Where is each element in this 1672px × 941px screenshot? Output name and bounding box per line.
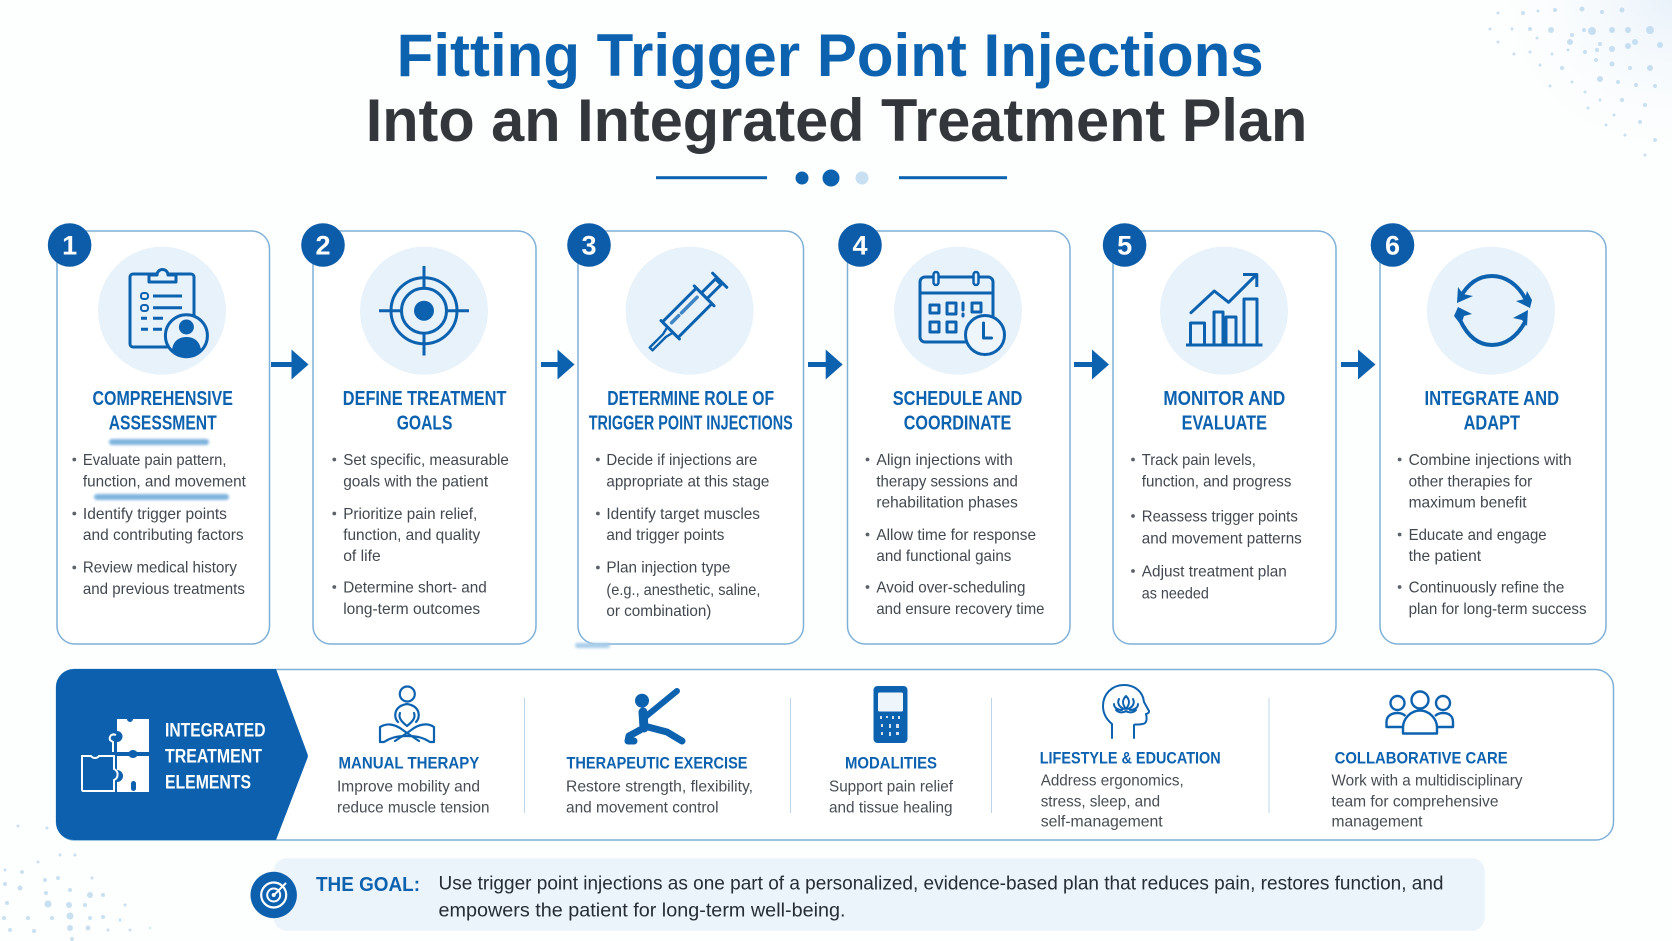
step title: EVALUATE — [1182, 412, 1267, 434]
step title: DETERMINE ROLE OF — [607, 388, 774, 410]
panel: step 2 define treatment goals — [301, 223, 536, 644]
element: therapeutic exercise: and movement control — [566, 799, 718, 816]
step bullets: Adjust treatment plan — [1142, 564, 1287, 581]
step title: INTEGRATE AND — [1424, 388, 1559, 410]
step title: GOALS — [397, 412, 452, 434]
element: therapeutic exercise: THERAPEUTIC EXERCISE — [566, 754, 748, 773]
step number 2 — [301, 223, 345, 267]
step bullets: and contributing factors — [83, 527, 244, 544]
step title: SCHEDULE AND — [893, 388, 1022, 410]
step title: ASSESSMENT — [109, 412, 217, 434]
icon: meditating person — [380, 686, 434, 742]
step title: ADAPT — [1464, 412, 1520, 434]
arrow 2 to 3 — [541, 350, 574, 380]
step title: COMPREHENSIVE — [92, 388, 233, 410]
step bullets: the patient — [1409, 548, 1482, 565]
element: therapeutic exercise: Restore strength, flexibility, — [566, 779, 753, 796]
element: therapeutic exercise — [566, 691, 753, 816]
step title: DEFINE TREATMENT — [343, 388, 506, 410]
icon: head with lotus — [1103, 685, 1149, 738]
step bullets — [72, 452, 246, 598]
step number 3: 3 — [581, 230, 597, 260]
step bullets: Continuously refine the — [1409, 580, 1564, 597]
step number 6: 6 — [1385, 230, 1400, 260]
step bullets: Set specific, measurable — [343, 452, 509, 469]
step number 1 — [48, 223, 91, 267]
element: modalities — [829, 686, 954, 816]
element: collaborative care: COLLABORATIVE CARE — [1335, 748, 1508, 767]
step bullets: and ensure recovery time — [876, 601, 1044, 618]
step bullets: and previous treatments — [83, 581, 245, 598]
step bullets: maximum benefit — [1409, 495, 1527, 512]
step bullets: Educate and engage — [1409, 527, 1547, 544]
step bullets — [1131, 452, 1302, 602]
step title — [893, 388, 1022, 434]
panel: step 6 integrate and adapt — [1371, 223, 1606, 644]
step bullets — [1398, 452, 1587, 618]
step bullets: function, and movement — [83, 474, 246, 491]
icon: calendar with clock — [894, 247, 1022, 375]
step bullets: function, and quality — [343, 527, 480, 544]
step bullets: therapy sessions and — [876, 474, 1018, 491]
step bullets: long-term outcomes — [343, 601, 480, 618]
step number 4 — [838, 223, 882, 267]
arrow 3 to 4 — [808, 350, 843, 380]
step bullets: Review medical history — [83, 560, 237, 577]
icon: device — [874, 686, 908, 743]
step number 5 — [1103, 223, 1146, 267]
element: modalities: MODALITIES — [845, 754, 937, 773]
element: collaborative care: Work with a multidisciplinary — [1332, 773, 1522, 790]
step title — [1163, 388, 1285, 434]
callout: the goal — [251, 858, 1485, 931]
icon: syringe — [626, 247, 754, 375]
element: manual therapy: reduce muscle tension — [337, 799, 490, 816]
icon: puzzle pieces — [82, 719, 149, 792]
element: manual therapy: MANUAL THERAPY — [338, 754, 480, 773]
element: lifestyle and education — [1040, 685, 1221, 831]
icon: bar chart with arrow — [1160, 247, 1288, 375]
arrow 5 to 6 — [1341, 350, 1376, 380]
panel: integrated treatment elements — [56, 669, 1614, 840]
icon: target — [360, 247, 488, 375]
step bullets: (e.g., anesthetic, saline, — [606, 582, 760, 599]
icon: clipboard with patient — [98, 247, 226, 375]
step bullets: Track pain levels, — [1142, 452, 1256, 469]
step number 2: 2 — [315, 230, 331, 260]
step bullets: function, and progress — [1142, 474, 1291, 491]
step bullets: and trigger points — [606, 527, 724, 544]
title: Fitting Trigger Point Injections — [397, 22, 1264, 89]
element: lifestyle and education: Address ergonomics, — [1041, 773, 1184, 790]
step bullets: or combination) — [606, 603, 711, 620]
step title: MONITOR AND — [1163, 388, 1285, 410]
step title: TRIGGER POINT INJECTIONS — [589, 412, 793, 434]
step bullets: Prioritize pain relief, — [343, 506, 477, 523]
icon: goal target — [251, 872, 297, 918]
element: manual therapy — [337, 686, 490, 816]
step bullets: Combine injections with — [1409, 452, 1572, 469]
step bullets: as needed — [1142, 585, 1209, 602]
title — [366, 22, 1307, 154]
step title — [589, 388, 793, 434]
icon: team — [1386, 692, 1453, 734]
step number 1: 1 — [62, 230, 77, 260]
step bullets: Plan injection type — [606, 560, 730, 577]
step bullets: Evaluate pain pattern, — [83, 452, 227, 469]
step bullets: rehabilitation phases — [876, 495, 1018, 512]
step bullets: Decide if injections are — [606, 452, 757, 469]
element: collaborative care: management — [1332, 814, 1423, 831]
step bullets: Determine short- and — [343, 580, 487, 597]
step bullets: Identify target muscles — [606, 506, 760, 523]
step bullets: Align injections with — [876, 452, 1013, 469]
step title — [1424, 388, 1559, 434]
step bullets: Identify trigger points — [83, 506, 227, 523]
step bullets: of life — [343, 548, 381, 565]
step bullets: plan for long-term success — [1409, 601, 1587, 618]
element: collaborative care: team for comprehensive — [1332, 794, 1499, 811]
step bullets: and functional gains — [876, 548, 1011, 565]
panel: step 5 monitor and evaluate — [1103, 223, 1336, 644]
element: lifestyle and education: LIFESTYLE & EDUCATION — [1040, 748, 1221, 767]
arrow 4 to 5 — [1074, 350, 1109, 380]
callout: the goal: Use trigger point injections as one part of a personalized, evidence-based plan that reduces pain, restores function, and — [438, 872, 1444, 894]
banner: integrated treatment elements: ELEMENTS — [165, 772, 251, 793]
step bullets: and movement patterns — [1142, 530, 1302, 547]
panel: step 1 comprehensive assessment — [48, 223, 269, 644]
element: manual therapy: Improve mobility and — [337, 779, 480, 796]
step number 5: 5 — [1117, 230, 1132, 260]
element: lifestyle and education: self-management — [1041, 814, 1163, 831]
panel: step 3 determine role — [567, 223, 804, 648]
step number 4: 4 — [852, 230, 868, 260]
icon: exercising figure — [628, 691, 682, 741]
banner: integrated treatment elements — [56, 669, 308, 840]
step title: COORDINATE — [904, 412, 1011, 434]
step title — [343, 388, 506, 434]
element: modalities: Support pain relief — [829, 779, 954, 796]
title: Into an Integrated Treatment Plan — [366, 87, 1307, 154]
callout: the goal: empowers the patient for long-term well-being. — [438, 900, 846, 922]
banner: integrated treatment elements: TREATMENT — [165, 747, 262, 768]
element: collaborative care — [1332, 692, 1522, 831]
step bullets: goals with the patient — [343, 474, 489, 491]
element: lifestyle and education: stress, sleep, and — [1041, 794, 1160, 811]
step bullets: Allow time for response — [876, 527, 1036, 544]
step bullets — [332, 452, 509, 618]
icon: cycle arrows — [1427, 247, 1555, 375]
step number 3 — [567, 223, 611, 267]
step title — [92, 388, 233, 434]
banner: integrated treatment elements: INTEGRATED — [165, 721, 266, 742]
callout: the goal: THE GOAL: — [316, 873, 420, 896]
step bullets: other therapies for — [1409, 474, 1533, 491]
step bullets: appropriate at this stage — [606, 474, 769, 491]
panel: step 4 schedule and coordinate — [838, 223, 1070, 644]
step bullets: Reassess trigger points — [1142, 509, 1298, 526]
step bullets — [866, 452, 1044, 618]
step number 6 — [1371, 223, 1414, 267]
arrow 1 to 2 — [271, 350, 308, 380]
step bullets — [596, 452, 769, 620]
element: modalities: and tissue healing — [829, 799, 952, 816]
step bullets: Avoid over-scheduling — [876, 580, 1025, 597]
